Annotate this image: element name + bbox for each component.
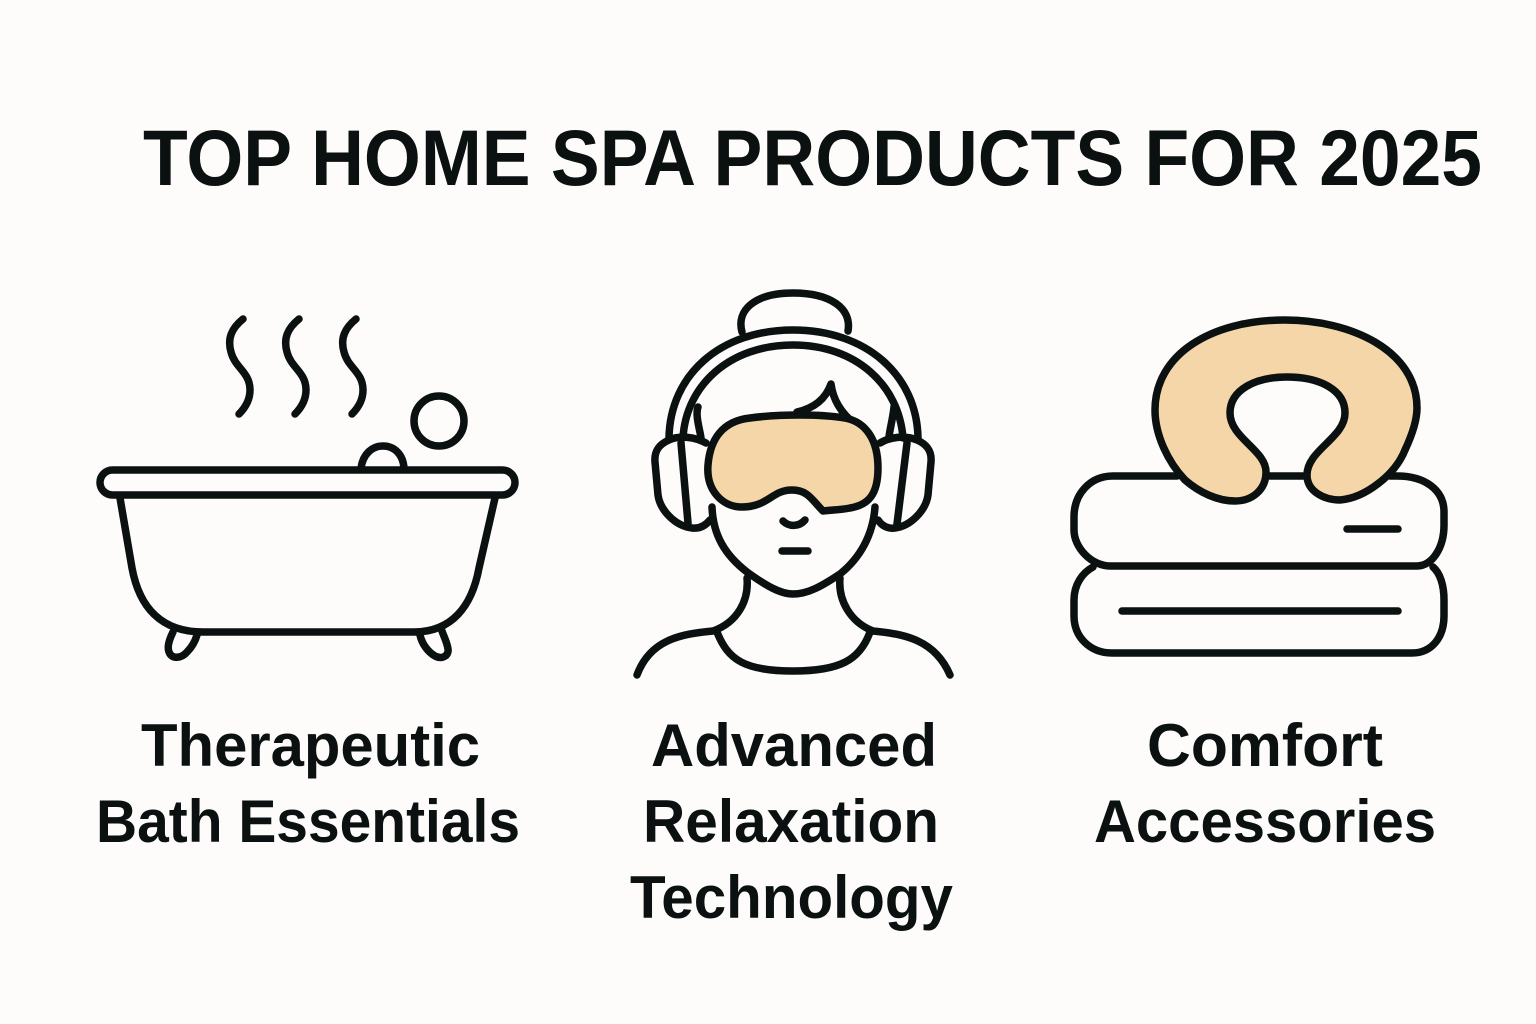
label: relaxation technology	[630, 712, 954, 931]
label: relaxation technology: Advanced	[651, 712, 937, 779]
icon: neck pillow on towels	[1074, 320, 1444, 653]
label: relaxation technology: Relaxation	[643, 788, 939, 855]
label: relaxation technology: Technology	[630, 864, 954, 931]
hair bun	[741, 293, 848, 332]
icon: bathtub	[100, 319, 515, 657]
tub rim	[100, 470, 515, 495]
bottom towel	[1074, 567, 1444, 653]
label: bath essentials	[96, 712, 520, 855]
label: comfort accessories: Accessories	[1094, 788, 1436, 855]
headband inner	[683, 345, 903, 438]
tub body	[120, 498, 495, 632]
side hair	[697, 407, 701, 438]
bubble	[414, 396, 464, 446]
top towel	[1074, 476, 1444, 566]
headband outer	[669, 330, 918, 438]
eye mask	[708, 415, 878, 511]
label: bath essentials: Therapeutic	[141, 712, 480, 779]
icon: person with eye mask and headphones	[637, 293, 950, 675]
tub feet	[168, 632, 197, 657]
label: comfort accessories	[1094, 712, 1436, 855]
collar	[717, 632, 870, 671]
steam	[230, 319, 363, 414]
label: comfort accessories: Comfort	[1147, 712, 1383, 779]
right ear cup	[878, 437, 931, 528]
neck and shoulders left	[637, 578, 747, 675]
face	[712, 507, 875, 594]
nose	[783, 520, 805, 525]
mouth	[782, 547, 808, 555]
towel lines	[1347, 525, 1398, 533]
left ear cup	[655, 437, 710, 528]
half bubble	[361, 446, 404, 468]
neck and shoulders right	[840, 578, 950, 675]
neck pillow	[1155, 320, 1417, 501]
hair fringe	[797, 384, 855, 424]
label: bath essentials: Bath Essentials	[96, 788, 520, 855]
